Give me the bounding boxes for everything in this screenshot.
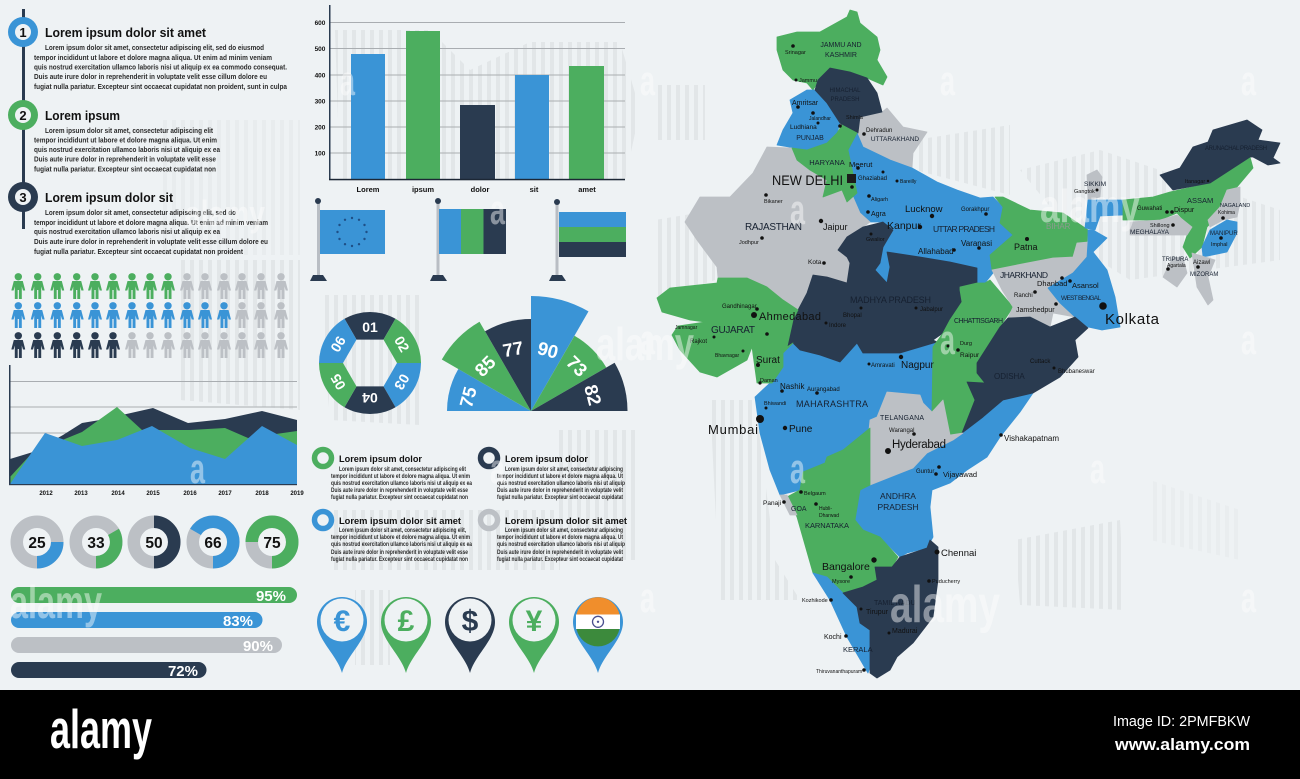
bar 83%: 83% <box>223 613 253 630</box>
city names: Varanasi <box>961 239 992 248</box>
city names: Raipur <box>960 352 980 359</box>
city names: Jaipur <box>823 222 848 232</box>
donut gauges <box>17 522 292 562</box>
legend: gray: fugiat nulla pariatur. Excepteur sint occaecat cupidatat <box>497 557 623 563</box>
progress bars <box>11 587 297 680</box>
stock watermarks: a <box>640 574 655 621</box>
city names: Ranchi <box>1014 293 1033 299</box>
city names: Gwalior <box>866 237 885 243</box>
donut: 50: 50 <box>145 535 163 552</box>
state names: GUJARAT <box>711 325 755 336</box>
pin: pound: £ <box>398 605 415 638</box>
stock watermarks: a <box>1090 445 1105 492</box>
state names: KARNATAKA <box>805 521 849 530</box>
city names: Guntur <box>916 469 934 475</box>
step 1: 1 <box>19 25 27 40</box>
segmented ring chart <box>319 312 421 414</box>
people row: dark 6 of 15 <box>11 332 288 358</box>
legend: blue: Lorem ipsum dolor sit amet <box>339 516 462 527</box>
city names: Aizawl <box>1193 260 1210 266</box>
stock watermarks: alamy <box>185 193 265 234</box>
step 3: Lorem ipsum dolor sit <box>45 190 174 205</box>
bar chart: 300 <box>315 98 326 106</box>
state names: JAMMU AND <box>820 42 862 49</box>
city names: Bhavnagar <box>715 353 740 359</box>
step 2: quis nostrud exercitation ullamco laboris nisi ut aliquip ex ea <box>34 145 221 154</box>
city names: Dispur <box>1174 207 1195 214</box>
city names: Kota <box>808 259 822 266</box>
stock watermarks: a <box>640 57 655 104</box>
city names: Durg <box>960 341 972 347</box>
people row: blue 12 of 15 <box>11 302 288 328</box>
city names: Belgaum <box>804 491 826 497</box>
city names: Madurai <box>892 628 918 635</box>
pin: pound <box>381 597 431 673</box>
city names: Rajkot <box>690 339 707 345</box>
area chart: 2013 <box>74 491 88 497</box>
state names: MADHYA PRADESH <box>850 295 931 305</box>
stock watermarks: a <box>1241 574 1256 621</box>
bar chart: 100 <box>315 150 326 158</box>
city names: Daman <box>760 378 778 384</box>
donut: 25: 25 <box>28 535 46 552</box>
step 1: tempor incididunt ut labore et dolore magna aliqua. Ut enim ad minim veniam <box>34 53 272 62</box>
donut: 75 <box>252 522 292 562</box>
area chart: 2015 <box>146 491 160 497</box>
city names: Kochi <box>824 634 842 641</box>
state names: HIMACHAL <box>829 88 861 94</box>
pictogram chart <box>11 273 288 358</box>
legend: gray: Lorem ipsum dolor sit amet, consectetur adipiscing <box>505 528 623 534</box>
flag: European Union <box>310 198 385 281</box>
bar chart: 600 <box>315 20 326 27</box>
step 2: 2 <box>19 108 27 123</box>
city names: Gangtok <box>1074 189 1095 195</box>
area chart: 2012 <box>39 491 53 497</box>
city names: Dehradun <box>866 128 892 134</box>
city names <box>675 50 1235 675</box>
step 1 <box>8 17 288 91</box>
pin: euro <box>317 597 367 673</box>
stock watermarks: a <box>340 57 355 104</box>
legend: gray: quis nostrud exercitation ullamco laboris nisi ut aliquip <box>497 542 625 548</box>
state names: NAGALAND <box>1220 203 1250 209</box>
legend: blue: Duis aute irure dolor in reprehenderit in voluptate velit esse <box>331 550 469 556</box>
city names: Asansol <box>1072 281 1099 290</box>
state names: MAHARASHTRA <box>796 399 868 409</box>
capital: New Delhi: NEW DELHI <box>772 172 843 188</box>
state names: PRADESH <box>830 97 860 103</box>
city names: Gorakhpur <box>961 207 989 213</box>
people row: green 9 of 15 <box>11 273 288 299</box>
bar 90% <box>11 637 282 655</box>
bar 72% <box>11 662 206 680</box>
city names: Jamshedpur <box>1016 307 1055 314</box>
state names: ODISHA <box>994 372 1025 381</box>
city names: Panaji <box>763 500 781 507</box>
state names: UTTAR PRADESH <box>933 224 995 234</box>
state names: KERALA <box>843 645 873 654</box>
step 1: Lorem ipsum dolor sit amet <box>45 25 207 40</box>
stock watermarks: alamy <box>596 318 694 370</box>
fan chart <box>442 296 628 411</box>
legend: green: quis nostrud exercitation ullamco laboris nisi ut aliquip ex ea <box>331 481 473 487</box>
area chart: 2014 <box>111 491 125 497</box>
pin: India flag <box>573 597 623 673</box>
state names: TAMIL NADU <box>874 600 916 607</box>
city names: Ahmedabad <box>759 311 821 323</box>
legend: gray: Duis aute irure dolor in reprehenderit in voluptate velit <box>497 550 623 556</box>
donut: 25 <box>17 522 57 562</box>
city names: Lucknow <box>905 204 943 215</box>
city names: Tirupur <box>866 609 889 616</box>
legend: dark: Lorem ipsum dolor sit amet, consectetur adipiscing <box>505 467 623 473</box>
map pins <box>317 597 623 673</box>
area chart <box>9 365 304 497</box>
state names: GOA <box>791 506 807 513</box>
stock watermarks: a <box>790 445 805 492</box>
city names: Pune <box>789 424 813 435</box>
state names: JHARKHAND <box>1000 270 1048 280</box>
image id: Image ID: 2PMFBKW <box>1113 713 1251 730</box>
fan chart: 77 <box>501 337 525 361</box>
step 3: Lorem ipsum dolor sit amet, consectetur adipiscing elit, sed do <box>45 208 236 217</box>
flag: vertical tricolour <box>430 198 506 281</box>
pin: yen <box>509 597 559 673</box>
state names: RAJASTHAN <box>745 222 802 233</box>
state names: PRADESH <box>877 502 919 512</box>
bar 83% <box>11 612 262 630</box>
city names: Patna <box>1014 242 1038 252</box>
city names: Kanpur <box>887 220 921 232</box>
bar 72%: 72% <box>168 663 198 680</box>
bar chart: 500 <box>315 46 326 53</box>
city names: Shimla <box>846 115 864 121</box>
map of India <box>657 10 1280 678</box>
legend: green: Lorem ipsum dolor sit amet, consectetur adipiscing elit <box>339 467 466 473</box>
city names: Chennai <box>941 548 976 559</box>
legend: dark: tempor incididunt ut labore et dolore magna aliqua. Ut <box>497 474 623 480</box>
bar chart: amet <box>578 185 596 194</box>
donut: 66 <box>193 522 233 562</box>
state names: HARYANA <box>809 158 845 167</box>
step 3: Duis aute irure dolor in reprehenderit in voluptate velit esse cillum dolore eu <box>34 237 268 246</box>
legend: dark: fugiat nulla pariatur. Excepteur sint occaecat cupidatat <box>497 495 623 501</box>
city names: Dhanbad <box>1037 279 1067 288</box>
legend: gray <box>480 512 628 563</box>
footer logo: alamy <box>50 698 152 760</box>
bar 95% <box>11 587 297 605</box>
city names: Agartala <box>1167 263 1186 269</box>
state names: MIZORAM <box>1190 272 1218 278</box>
city names: Nagpur <box>901 360 934 371</box>
state regions <box>657 10 1280 678</box>
area chart: 2019 <box>290 491 304 497</box>
bar chart: sit <box>530 185 539 194</box>
state names: ANDHRA <box>880 491 916 501</box>
step 3: tempor incididunt ut labore et dolore magna aliqua. Ut enim ad minim veniam <box>34 218 268 227</box>
stock watermarks: a <box>190 445 205 492</box>
pin: dollar <box>445 597 495 673</box>
city names: Allahabad <box>918 247 954 256</box>
city names: Bhiwandi <box>764 401 786 407</box>
step 2: Lorem ipsum dolor sit amet, consectetur adipiscing elit <box>45 126 213 135</box>
city names: Shillong <box>1150 223 1170 229</box>
step 2 <box>8 100 221 174</box>
city dots <box>712 44 1225 672</box>
state names: WEST BENGAL <box>1061 295 1101 302</box>
step 3: fugiat nulla pariatur. Excepteur sint occaecat cupidatat non proident <box>34 247 243 256</box>
legend: blue: Lorem ipsum dolor sit amet, consectetur adipiscing elit, <box>339 528 466 534</box>
stock watermarks: a <box>490 445 505 492</box>
area chart: 2018 <box>255 491 269 497</box>
step 2: tempor incididunt ut labore et dolore magna aliqua. Ut enim <box>34 136 217 144</box>
stock watermarks <box>10 57 1256 634</box>
legend: green <box>314 450 473 501</box>
stock watermarks: a <box>940 316 955 363</box>
segmented ring chart: 03 <box>391 371 413 393</box>
donut: 33 <box>76 522 116 562</box>
segmented ring chart: 06 <box>327 333 349 355</box>
donut: 75: 75 <box>263 535 281 552</box>
bar 90%: 90% <box>243 638 273 655</box>
stock watermarks: a <box>940 57 955 104</box>
city names: Dharwad <box>819 513 839 519</box>
legend: blue <box>314 512 473 563</box>
step 2: Duis aute irure dolor in reprehenderit in voluptate velit esse <box>34 154 216 164</box>
legend: dark <box>480 450 625 501</box>
bar chart: ipsum <box>412 185 434 194</box>
legend: dark: Duis aute irure dolor in reprehenderit in voluptate velit <box>497 488 623 494</box>
flag: horizontal tricolour <box>549 199 626 281</box>
step 3 <box>8 182 268 256</box>
legend: dark: Lorem ipsum dolor <box>505 454 588 465</box>
state names: BIHAR <box>1046 222 1071 231</box>
bar chart: Lorem <box>357 185 380 194</box>
donut: 66: 66 <box>204 535 222 552</box>
city names: Thiruvananthapuram <box>816 669 862 675</box>
city names: Itanagar <box>1185 179 1205 185</box>
state names: PUNJAB <box>796 135 824 142</box>
state names: SIKKIM <box>1084 181 1106 188</box>
state names: MEGHALAYA <box>1130 229 1170 236</box>
legend: gray: Lorem ipsum dolor sit amet <box>505 516 628 527</box>
donut: 50 <box>134 522 174 562</box>
legend: blue: fugiat nulla pariatur. Excepteur sint occaecat cupidatat non <box>331 557 468 563</box>
stock watermarks: alamy <box>1040 180 1140 232</box>
legend: blue: tempor incididunt ut labore et dolore magna aliqua. Ut enim <box>331 535 470 541</box>
segmented ring chart: 05 <box>327 371 349 393</box>
bar chart <box>315 5 625 194</box>
state names <box>711 42 1267 654</box>
area chart: 2017 <box>218 491 232 497</box>
city names: Jalandhar <box>809 116 831 122</box>
legend: green: Duis aute irure dolor in reprehenderit in voluptate velit esse <box>331 488 469 494</box>
pin: yen: ¥ <box>526 605 543 638</box>
step 3: 3 <box>19 190 27 205</box>
city names: Nashik <box>780 382 805 391</box>
state names: TRIPURA <box>1162 257 1188 263</box>
city names: Bangalore <box>822 561 870 573</box>
step 1: quis nostrud exercitation ullamco laboris nisi ut aliquip ex ea commodo consequat. <box>34 62 287 72</box>
step 1: Lorem ipsum dolor sit amet, consectetur adipiscing elit, sed do eiusmod <box>45 43 264 52</box>
pin: euro: € <box>334 605 351 638</box>
legend: dark: quis nostrud exercitation ullamco laboris nisi ut aliquip <box>497 481 625 487</box>
city names: Gandhinagar <box>722 304 757 310</box>
step 3: quis nostrud exercitation ullamco laboris nisi ut aliquip ex ea <box>34 227 221 236</box>
legend blocks <box>314 450 628 563</box>
city names: Kohima <box>1218 210 1235 216</box>
segmented ring chart: 01 <box>362 319 378 335</box>
city names: Jammu <box>799 78 817 84</box>
city names: Amravati <box>871 363 895 369</box>
bar 95%: 95% <box>256 588 286 605</box>
city names: Ludhiana <box>790 124 817 131</box>
legend: blue: quis nostrud exercitation ullamco laboris nisi ut aliquip ex ea <box>331 542 473 548</box>
step 1: fugiat nulla pariatur. Excepteur sint occaecat cupidatat non proident, sunt in culpa <box>34 82 288 91</box>
stock watermarks: a <box>790 186 805 233</box>
city names: Mumbai <box>708 422 758 437</box>
stock watermarks: a <box>1241 316 1256 363</box>
city names: Vishakapatnam <box>1004 434 1059 443</box>
bar chart: 400 <box>315 72 326 80</box>
stock watermarks: a <box>640 316 655 363</box>
city names: Mysore <box>832 579 850 585</box>
city names: Puducherry <box>932 579 960 585</box>
area chart: 2016 <box>183 491 197 497</box>
bar chart: dolor <box>471 185 489 194</box>
state names: TELANGANA <box>880 415 924 422</box>
city names: Amritsar <box>792 100 819 107</box>
city names: Aligarh <box>871 197 888 203</box>
city names: Kolkata <box>1105 311 1160 328</box>
state names: KASHMIR <box>825 52 857 59</box>
state names: ASSAM <box>1187 196 1213 205</box>
city names: Agra <box>871 211 886 218</box>
footer bar <box>0 690 1300 779</box>
fan chart: 90 <box>535 337 561 363</box>
state names: ARUNACHAL PRADESH <box>1205 146 1267 152</box>
city names: Cuttack <box>1030 359 1051 365</box>
city names: Vijayawad <box>943 470 977 479</box>
footer url: www.alamy.com <box>1114 735 1250 754</box>
city names: Imphal <box>1211 242 1228 248</box>
city names: Kozhikode <box>802 598 828 604</box>
city names: Jabalpur <box>920 307 943 313</box>
city names: Hyderabad <box>892 439 946 451</box>
stock watermarks: a <box>490 186 505 233</box>
city names: Warangal <box>889 428 914 434</box>
legend: green: tempor incididunt ut labore et dolore magna aliqua. Ut enim <box>331 474 470 480</box>
city names: Ghaziabad <box>858 176 887 182</box>
legend: green: Lorem ipsum dolor <box>339 454 422 465</box>
city names: Meerut <box>849 160 873 169</box>
city names: Bhubaneswar <box>1058 369 1095 375</box>
stock watermarks: alamy <box>890 576 1000 634</box>
stock watermarks: alamy <box>10 576 102 628</box>
fan chart: 75 <box>455 384 481 410</box>
city names: Jodhpur <box>739 240 759 246</box>
numbered list: timeline <box>8 9 288 256</box>
city names: Surat <box>756 355 780 366</box>
city names: Bhopal <box>843 313 862 319</box>
step 2: fugiat nulla pariatur. Excepteur sint occaecat cupidatat non <box>34 164 216 174</box>
stock watermarks: a <box>1241 57 1256 104</box>
city names: Bareilly <box>900 179 917 185</box>
bar chart: 200 <box>315 124 326 132</box>
city names: Bikaner <box>764 199 783 205</box>
segmented ring chart: 02 <box>391 333 413 355</box>
state names: MANIPUR <box>1210 231 1238 237</box>
city names: Guwahati <box>1137 206 1162 212</box>
legend: green: fugiat nulla pariatur. Excepteur sint occaecat cupidatat non <box>331 495 468 501</box>
city names: Indore <box>829 323 847 329</box>
legend: gray: tempor incididunt ut labore et dolore magna aliqua. Ut <box>497 535 623 541</box>
fan chart: 73 <box>562 351 592 381</box>
state names: CHHATTISGARH <box>954 318 1003 325</box>
pin: dollar: $ <box>462 605 479 638</box>
city names: Jamnagar <box>675 325 698 331</box>
city names: Hubli- <box>819 506 832 512</box>
step 1: Duis aute irure dolor in reprehenderit in voluptate velit esse cillum dolore eu <box>34 72 267 81</box>
state names: UTTARAKHAND <box>871 136 919 143</box>
city names: Srinagar <box>785 50 806 56</box>
fan chart: 82 <box>580 382 606 408</box>
segmented ring chart: 04 <box>362 390 378 406</box>
donut: 33: 33 <box>87 535 105 552</box>
city names: Aurangabad <box>807 387 840 393</box>
fan chart: 85 <box>470 351 500 381</box>
step 2: Lorem ipsum <box>45 108 120 123</box>
